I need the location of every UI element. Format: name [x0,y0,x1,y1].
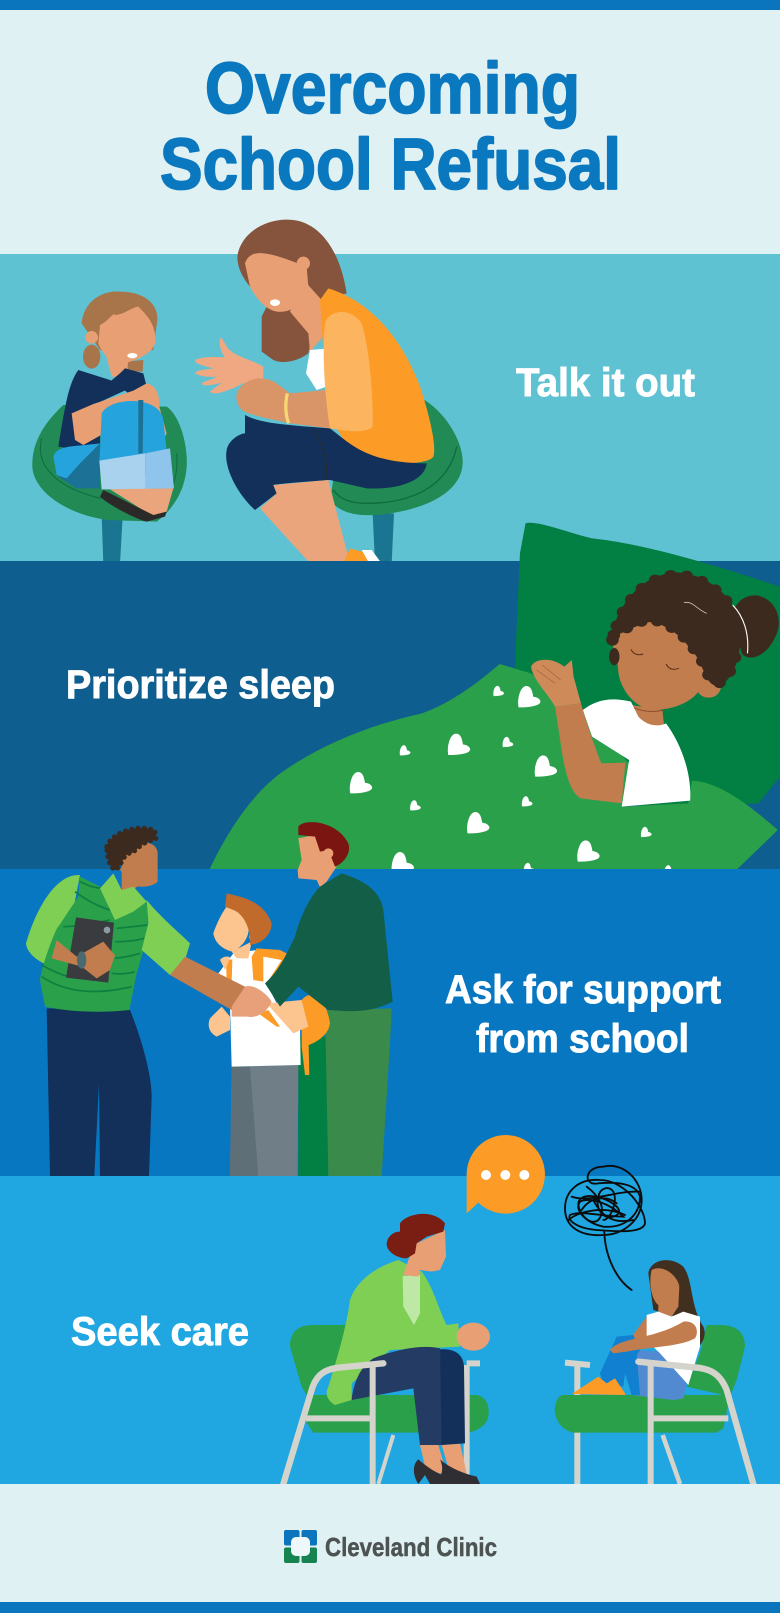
illustration: parent and child talking [32,220,463,563]
title: School Refusal [160,125,621,205]
panel: seek care [0,1135,780,1484]
icon: speech bubble [467,1135,545,1214]
illustration: therapist and patient [283,1135,753,1484]
title: Overcoming [205,49,580,129]
panel: talk it out [0,220,780,563]
label: ask for support from school: Ask for support [445,968,721,1012]
panel: ask for support from school [0,822,780,1176]
logo: Cleveland Clinic [284,1530,497,1563]
label: ask for support from school [445,968,721,1061]
icon: tangled thought scribble [565,1166,645,1290]
label: talk it out: Talk it out [516,361,695,405]
logo: Cleveland Clinic: Cleveland Clinic [325,1532,497,1562]
panel: prioritize sleep [0,523,780,875]
illustration: teacher, child and parent [26,822,393,1176]
top bar [0,0,780,10]
illustration: child sleeping in bed [209,523,780,875]
icon: tablet [66,917,114,983]
label: prioritize sleep: Prioritize sleep [66,663,335,707]
label: seek care: Seek care [71,1310,249,1354]
hearts pattern [350,686,675,875]
bottom bar [0,1602,780,1613]
title [160,49,621,205]
logo mark [284,1530,317,1563]
label: ask for support from school: from school [476,1017,689,1061]
